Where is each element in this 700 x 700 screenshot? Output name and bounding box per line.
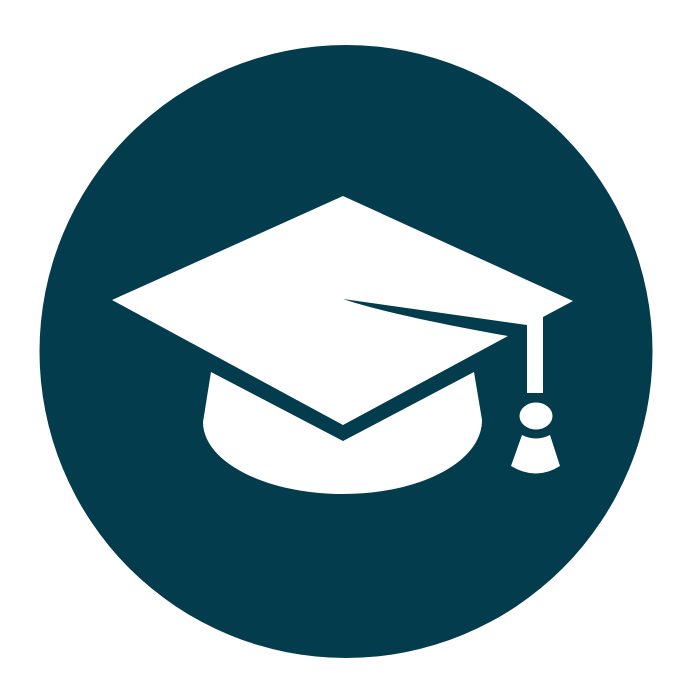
tassel fringe xyxy=(511,435,560,474)
icon: graduation cap xyxy=(112,196,573,494)
icon background: teal circle xyxy=(40,45,652,658)
cap body xyxy=(203,372,482,494)
cap board with tassel cord xyxy=(112,196,573,425)
tassel knob xyxy=(520,402,552,430)
